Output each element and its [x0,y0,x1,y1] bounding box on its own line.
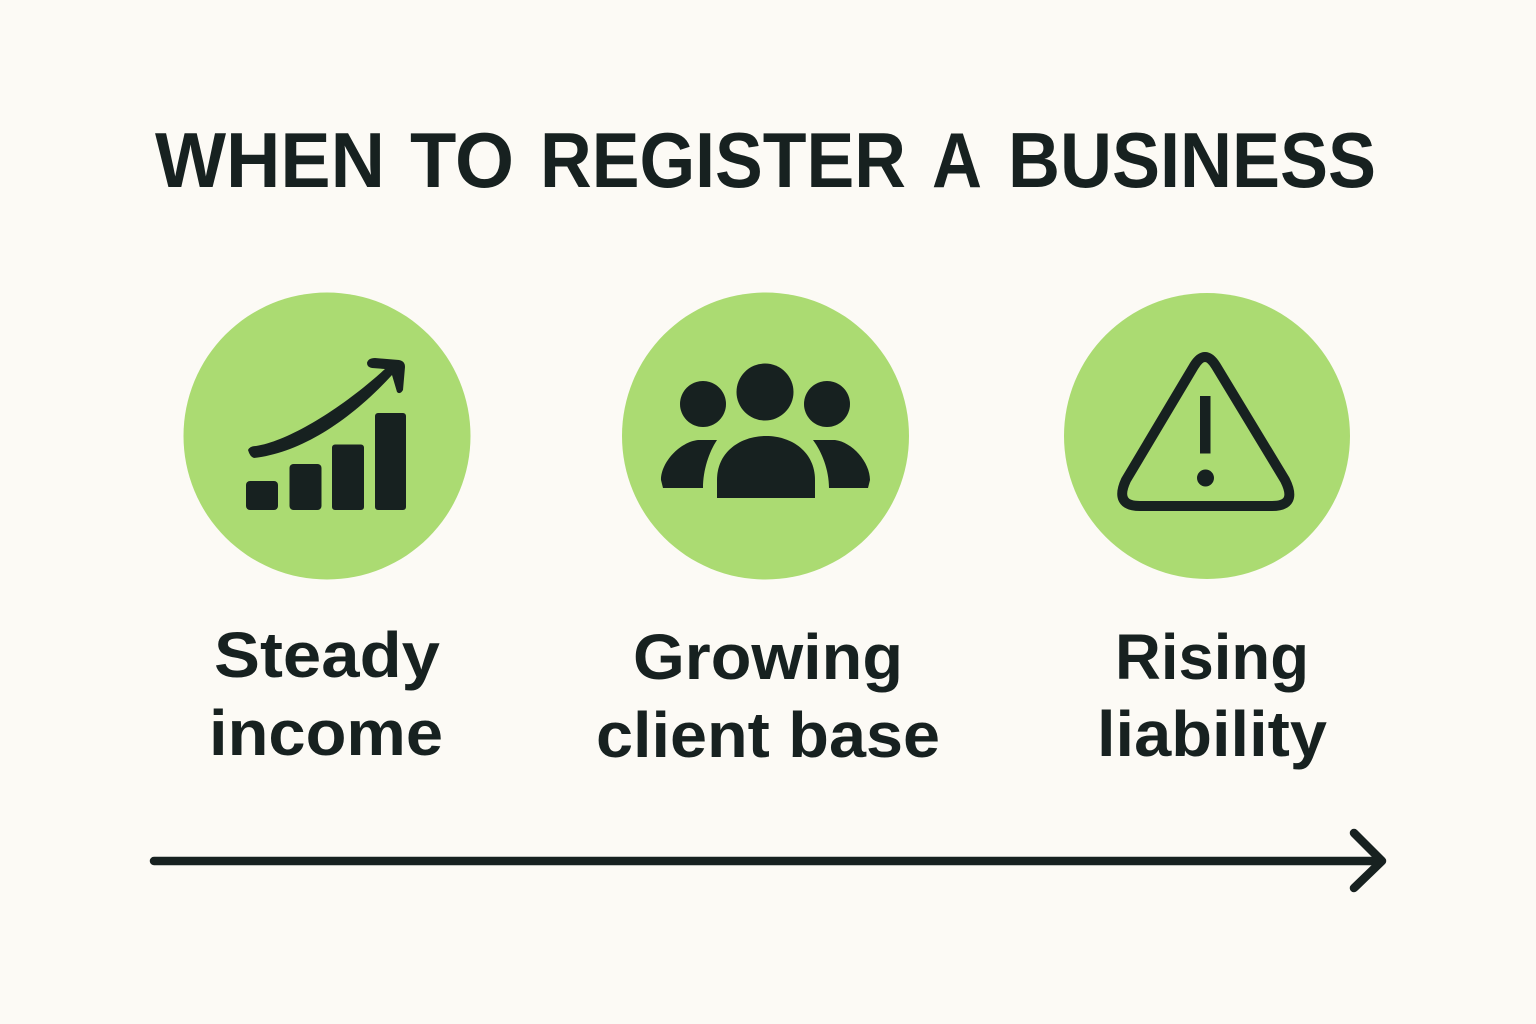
label: steady income: Steady [214,619,440,691]
title: BUSINESS [1008,116,1376,204]
icon: rising bar chart [246,358,406,510]
panel: rising liability [1064,293,1350,770]
label: rising liability: liability [1097,698,1327,770]
icon: warning triangle [1122,357,1289,506]
label: growing client base: client base [596,699,940,771]
label: rising liability [1097,621,1327,770]
arrow: timeline [154,833,1382,888]
icon circle: growing client base [622,292,909,580]
label: rising liability: Rising [1115,621,1309,693]
panel: growing client base [596,292,940,771]
label: growing client base [596,621,940,771]
title: REGISTER [540,116,906,204]
panel: steady income [184,292,470,769]
icon circle: rising liability [1064,293,1350,579]
label: steady income: income [209,697,443,769]
title: WHEN [155,116,385,204]
title: A [932,116,982,204]
label: steady income [209,619,443,769]
icon: group of people [661,364,870,498]
icon circle: steady income [184,292,470,580]
title: TO [410,116,514,204]
title [155,116,1376,204]
label: growing client base: Growing [633,621,903,693]
